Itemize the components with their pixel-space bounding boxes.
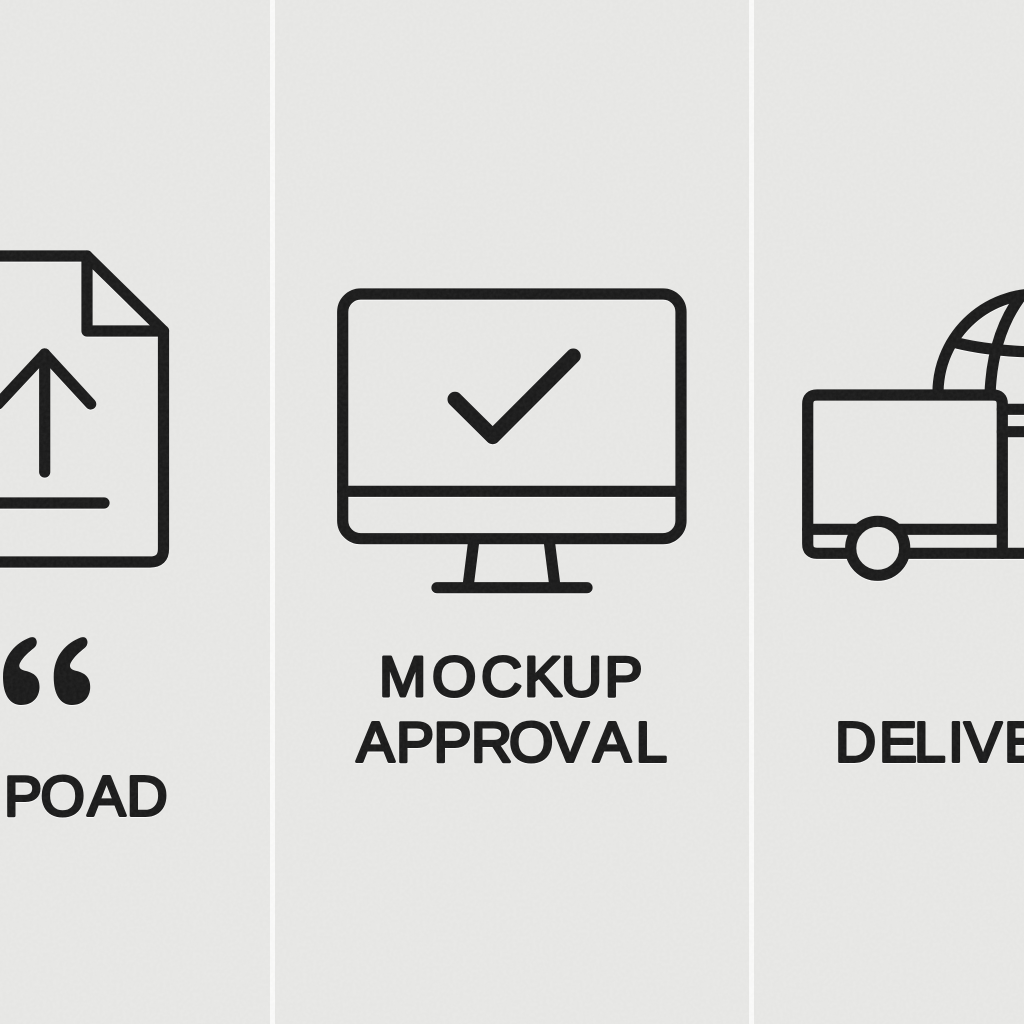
label: mockup approval	[356, 645, 667, 774]
icon: truck with globe	[808, 294, 1024, 575]
icon: document with upload arrow	[0, 256, 164, 562]
label: upload step: POAD	[4, 764, 168, 828]
label: mockup approval: APPROVAL	[356, 710, 667, 774]
panel: delivery	[754, 0, 1024, 1024]
icon: quotation marks	[3, 637, 90, 705]
panel: mockup approval	[275, 0, 749, 1024]
label: mockup approval: MOCKUP	[379, 645, 643, 709]
icon: monitor with check mark	[343, 294, 681, 588]
panel: upload	[0, 0, 270, 1024]
